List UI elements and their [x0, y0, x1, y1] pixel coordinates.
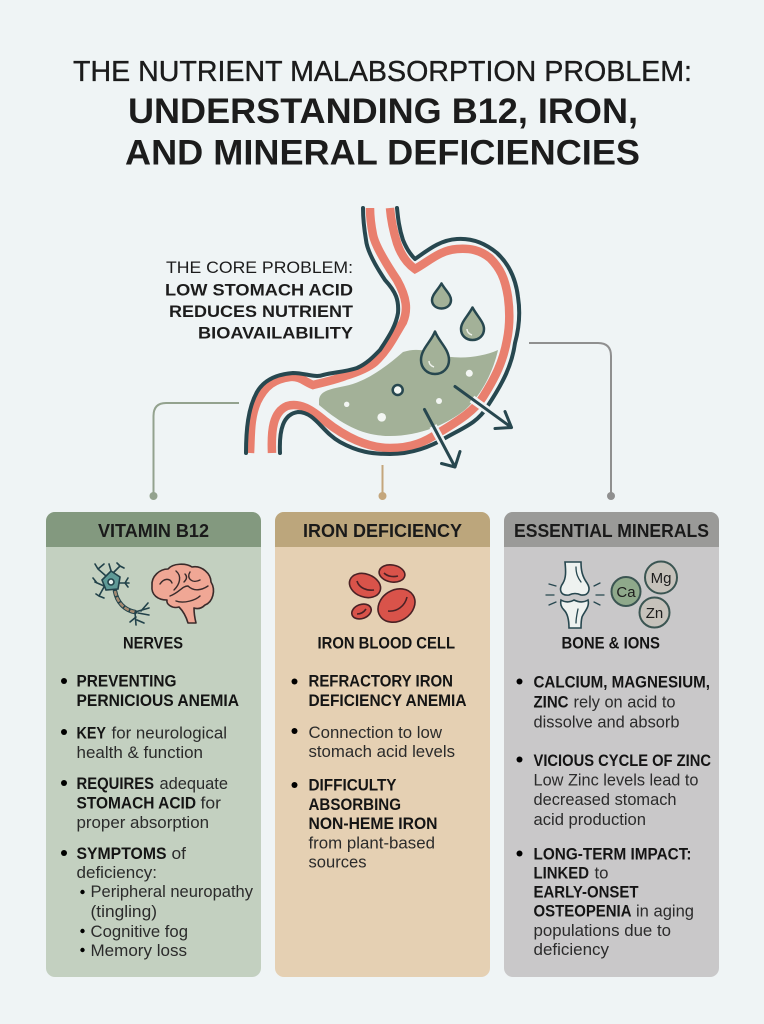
core problem text [165, 258, 354, 342]
bullet list: iron deficiency: NON-HEME IRON [308, 815, 438, 833]
bullet list: essential minerals [516, 674, 711, 959]
panel: iron deficiency [275, 512, 490, 977]
bullet list: vitamin b12: for neurological [112, 724, 227, 742]
bullet list: vitamin b12: PREVENTING [76, 672, 176, 690]
bullet list: vitamin b12: Peripheral neuropathy [90, 883, 254, 901]
bullet list: essential minerals: ZINC [534, 694, 569, 712]
bullet list: vitamin b12: proper absorption [76, 814, 209, 832]
core problem text: LOW STOMACH ACID [165, 280, 353, 300]
acid drops [421, 284, 484, 374]
icon: mineral ions [612, 562, 677, 628]
bullet list: essential minerals: VICIOUS CYCLE OF ZINC [534, 752, 711, 770]
bullet list: vitamin b12: of [172, 845, 186, 863]
icon: mineral ions: Zn [646, 605, 663, 622]
bullet list: vitamin b12: (tingling) [90, 903, 157, 921]
bullet list: vitamin b12: health & function [76, 744, 203, 762]
icon label: iron blood cell: IRON BLOOD CELL [318, 634, 455, 652]
bullet list: iron deficiency: stomach acid levels [308, 743, 455, 761]
core problem text: BIOAVAILABILITY [198, 324, 354, 342]
title: AND MINERAL DEFICIENCIES [125, 134, 640, 172]
icon: red blood cells [346, 563, 421, 629]
bullet list: essential minerals: to [594, 864, 608, 882]
icon label: nerves: NERVES [123, 634, 183, 652]
bullet list: essential minerals: acid production [534, 811, 646, 829]
bullet list: essential minerals: dissolve and absorb [534, 714, 680, 732]
stomach wall dark outlines [246, 208, 519, 454]
bullet list: essential minerals: OSTEOPENIA [534, 902, 632, 920]
connector: to vitamin b12 [150, 403, 239, 500]
bullet list: essential minerals: LINKED [534, 864, 589, 882]
panel header: vitamin b12 [46, 512, 261, 547]
bullet list: vitamin b12: Memory loss [90, 942, 187, 960]
bullet list: essential minerals: in aging [636, 902, 694, 920]
title: THE NUTRIENT MALABSORPTION PROBLEM: [73, 56, 692, 88]
core problem text: REDUCES NUTRIENT [169, 302, 354, 321]
panel header: essential minerals [504, 512, 719, 547]
icon label: bone and ions: BONE & IONS [562, 634, 660, 652]
bullet list: essential minerals: EARLY-ONSET [534, 884, 638, 902]
stomach acid pool [319, 350, 498, 436]
icon: brain [152, 564, 213, 623]
icon: mineral ions: Ca [616, 584, 636, 601]
panel header: iron deficiency [275, 512, 490, 547]
bullet list: essential minerals: CALCIUM, MAGNESIUM, [534, 674, 710, 692]
bullet list: essential minerals: populations due to [534, 922, 671, 940]
connector: to iron deficiency [378, 465, 386, 500]
panel: vitamin b12 [46, 512, 261, 977]
bullet list: essential minerals: Low Zinc levels lead to [534, 772, 698, 790]
title: UNDERSTANDING B12, IRON, [128, 92, 638, 131]
bullet list: iron deficiency: sources [308, 854, 366, 872]
bullet list: essential minerals: rely on acid to [574, 694, 676, 712]
bullet list: vitamin b12: for [200, 794, 222, 812]
bullet list: iron deficiency: DEFICIENCY ANEMIA [308, 692, 467, 710]
bullet list: iron deficiency: REFRACTORY IRON [308, 672, 453, 690]
bullet list: vitamin b12: Cognitive fog [90, 923, 188, 941]
icon: mineral ions: Mg [651, 570, 671, 587]
panel header: iron deficiency: IRON DEFICIENCY [303, 521, 462, 541]
bullet list: vitamin b12: KEY [76, 724, 106, 742]
bullet list: iron deficiency: from plant-based [308, 834, 435, 852]
bullet list: iron deficiency: Connection to low [308, 724, 442, 742]
bullet list: vitamin b12: REQUIRES [76, 775, 154, 793]
bullet list: vitamin b12: SYMPTOMS [76, 845, 166, 863]
icon: stomach [246, 208, 519, 467]
bullet list: vitamin b12: STOMACH ACID [76, 794, 196, 812]
core problem text: THE CORE PROBLEM: [166, 258, 353, 277]
nutrient bubbles [344, 370, 473, 422]
bullet list: vitamin b12: PERNICIOUS ANEMIA [76, 692, 239, 710]
bullet list: vitamin b12 [61, 672, 254, 960]
panel header: essential minerals: ESSENTIAL MINERALS [514, 521, 709, 541]
icon: knee joint bones [546, 562, 604, 628]
stomach wall pink bands [250, 208, 509, 453]
bullet list: essential minerals: LONG-TERM IMPACT: [534, 846, 692, 864]
bullet list: iron deficiency: ABSORBING [308, 796, 401, 814]
arrows: nutrients escaping [424, 386, 512, 467]
bullet list: essential minerals: deficiency [534, 941, 610, 959]
bullet list: iron deficiency [292, 672, 467, 872]
connector: to essential minerals [529, 343, 615, 500]
icon: neuron [93, 563, 149, 625]
bullet list: vitamin b12: adequate [160, 775, 228, 793]
panel: essential minerals [504, 512, 719, 977]
title [73, 56, 692, 172]
bullet list: essential minerals: decreased stomach [534, 791, 676, 809]
bullet list: vitamin b12: deficiency: [76, 864, 157, 882]
bullet list: iron deficiency: DIFFICULTY [308, 776, 396, 794]
panel header: vitamin b12: VITAMIN B12 [98, 521, 209, 541]
